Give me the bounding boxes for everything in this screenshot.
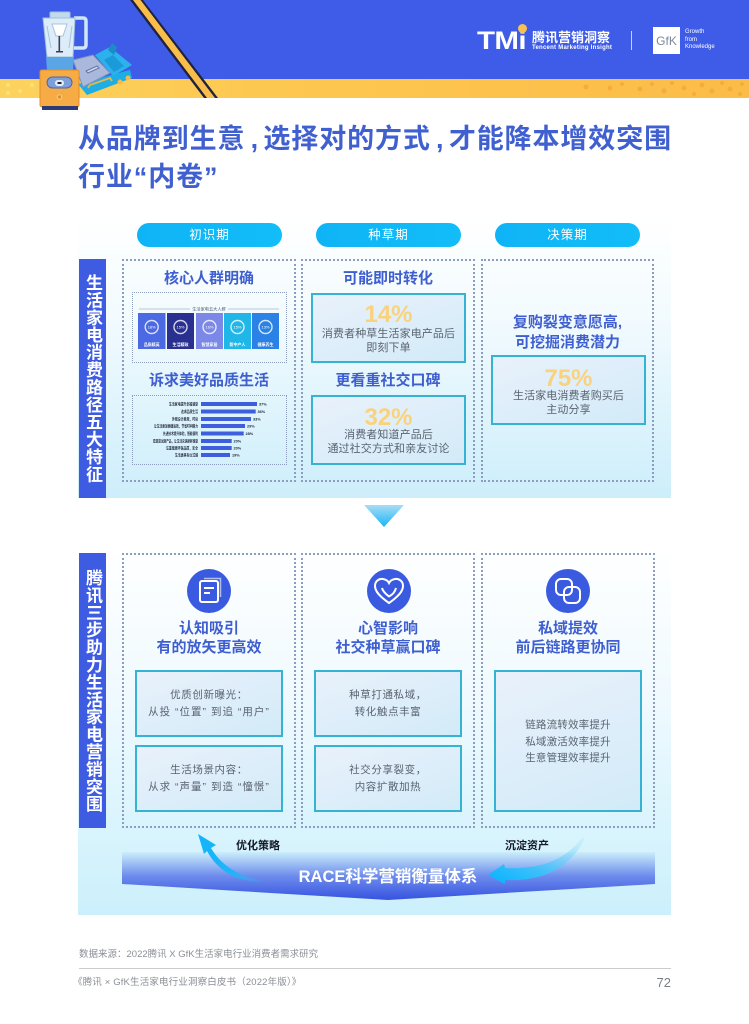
jug [43, 18, 75, 57]
card: scene content [135, 745, 283, 812]
card: efficiency list [494, 670, 642, 812]
stat description: 消费者知道产品后 [344, 429, 433, 441]
heading: social reputation: 更看重社交口碑 [335, 372, 440, 389]
panel: step 2 mind influence [301, 553, 475, 828]
tile 2: 生活精致 [172, 340, 188, 346]
chart box: five audience groups [132, 292, 287, 363]
panel: Tencent three steps background [78, 545, 671, 915]
bar labels: 先进技术提升体验，智能便利 [162, 430, 198, 436]
bar labels: 外观设计美观，时尚 [172, 416, 198, 421]
TMi wordmark: TMi [477, 27, 526, 55]
panel: decision stage [481, 259, 654, 482]
tile 5: 健康养生 [257, 340, 273, 346]
blue jug base [46, 57, 74, 70]
line 1: 生活场景内容： [170, 764, 248, 776]
line 2: 从求 “声量” 到造 “憧憬” [148, 781, 270, 793]
icon: blender and waffle maker [40, 12, 132, 110]
stat description: 生活家电消费者购买后 [513, 390, 624, 402]
bar values: 20% [233, 439, 241, 443]
bar labels: 追求品质生活 [180, 408, 198, 414]
page number: 72 [657, 975, 671, 990]
line 2: 从投 “位置” 到追 “用户” [148, 706, 270, 718]
diagonal stripe [130, 0, 218, 98]
title [78, 124, 672, 192]
chart title: 生活家电五大人群 [192, 305, 226, 312]
logo: GfK: GfK [656, 34, 677, 48]
panel: consumer path background [78, 215, 671, 498]
tile 3: 16% [205, 324, 213, 329]
tile 5: 13% [261, 324, 269, 329]
stage pill: 种草期 [316, 223, 461, 247]
stage pill: 种草期: 种草期 [368, 228, 409, 242]
heading: cognition: 认知吸引 [179, 620, 239, 637]
logo divider [631, 31, 632, 50]
heading: consumption potential: 可挖掘消费潜力 [515, 334, 620, 351]
chart box: quality life bar chart [132, 395, 287, 465]
bar values: 29% [246, 424, 255, 428]
stat 32%: 32% [364, 404, 413, 431]
English brand name: Tencent Marketing Insight [532, 45, 612, 51]
tile 1 [138, 312, 165, 348]
bar values [232, 402, 267, 457]
panel: seeding stage [301, 259, 475, 482]
stage pill: 初识期 [137, 223, 282, 247]
chart title [138, 305, 278, 312]
line 1: 优质创新曝光： [170, 689, 248, 701]
RACE band [122, 852, 655, 900]
panel: initial stage [122, 259, 296, 482]
stat 14%: 14% [364, 301, 413, 328]
footer rule [79, 968, 671, 969]
bars [200, 402, 256, 456]
label: settle assets: 沉淀资产 [505, 840, 549, 852]
tile 4: 新中产人 [229, 340, 245, 346]
yellow stripe with dots [0, 79, 749, 98]
side label: five features [79, 259, 106, 498]
panel: step 1 cognition [122, 553, 296, 828]
GfK tagline: from [685, 36, 697, 42]
tile 1: 品质精英 [143, 340, 159, 346]
tile 3: 智慧家居 [201, 340, 217, 346]
heading: instant conversion: 可能即时转化 [343, 270, 433, 287]
side label: three steps [79, 553, 106, 828]
bar labels: 让生活更加便捷高效，节省时间精力 [154, 423, 198, 428]
line 2: 私域激活效率提升 [525, 736, 611, 748]
tile 5 [252, 312, 278, 348]
tile 4 [224, 312, 250, 348]
GfK tagline: Growth [685, 29, 704, 35]
title: 从品牌到生意 选择对的方式 才能降本增效突围 [78, 124, 672, 154]
jug handle [73, 18, 86, 48]
blue header background [0, 0, 749, 79]
heading: efficient targeting: 有的放矢更高效 [156, 639, 262, 656]
card: social sharing [314, 745, 462, 812]
bar labels [152, 401, 198, 457]
waffle maker base [78, 70, 132, 95]
tile 1: 18% [147, 324, 156, 329]
stage pill: 决策期: 决策期 [547, 228, 588, 242]
bar labels: 愿意尝试新产品，让生活充满新鲜感受 [152, 438, 198, 443]
stage pill: 决策期 [495, 223, 640, 247]
stat description line 2: 通过社交方式和亲友讨论 [327, 443, 450, 455]
panel: step 3 private domain [481, 553, 655, 828]
arrow: optimize strategy [198, 834, 262, 882]
heading: repurchase: 复购裂变意愿高, [513, 314, 622, 331]
RACE label: RACE科学营销衡量体系 [299, 868, 477, 886]
line 3: 生意管理效率提升 [525, 752, 611, 764]
GfK tagline [685, 28, 715, 50]
heading: private efficiency: 私域提效 [538, 620, 598, 637]
tile 4: 15% [233, 324, 241, 329]
icon: linked squares [546, 569, 590, 613]
side label: five features: 生活家电消费路径五大特征 [83, 274, 102, 483]
arrow: settle assets [488, 838, 584, 884]
source note: 数据来源：2022腾讯 X GfK生活家电行业消费者需求研究 [79, 949, 318, 960]
stat description line 2: 即刻下单 [366, 342, 411, 354]
orange dot [518, 24, 527, 33]
card: 75% [491, 355, 646, 425]
logo: GfK [653, 27, 680, 54]
orange base [40, 70, 79, 107]
icon: book [187, 569, 231, 613]
bar labels: 注重健康环保品质，安全 [166, 445, 198, 450]
card: private domain [314, 670, 462, 737]
stat description: 消费者种草生活家电产品后 [322, 328, 455, 340]
line 1: 社交分享裂变， [349, 764, 427, 776]
stat 75%: 75% [544, 365, 593, 392]
tile 2 [166, 312, 194, 348]
title: 行业“内卷” [78, 162, 218, 192]
Chinese brand name: 腾讯营销洞察 [532, 30, 610, 45]
heading: core audience: 核心人群明确 [164, 270, 254, 287]
bar values: 19% [232, 453, 240, 457]
title: , [436, 124, 444, 154]
logo: TMI Tencent Marketing Insight [477, 24, 612, 55]
tile 3 [196, 312, 222, 348]
side label: three steps: 腾讯三步助力生活家电营销突围 [83, 569, 102, 812]
label: optimize strategy: 优化策略 [236, 840, 280, 852]
footer publication title: 《腾讯 × GfK生活家电行业洞察白皮书（2022年版）》 [73, 977, 301, 988]
line 2: 内容扩散加热 [355, 781, 421, 793]
arrow: down triangle [364, 505, 404, 527]
line 1: 链路流转效率提升 [525, 719, 611, 731]
line 2: 转化触点丰富 [355, 706, 421, 718]
card: exposure [135, 670, 283, 737]
header band [0, 0, 749, 98]
heading: social seeding: 社交种草赢口碑 [335, 639, 440, 656]
line 1: 种草打通私域， [349, 689, 427, 701]
icon: heart [367, 569, 411, 613]
tile 2: 15% [176, 324, 184, 329]
stage pill: 初识期: 初识期 [189, 228, 230, 242]
bar labels: 生活家电提升幸福感受 [168, 401, 198, 406]
heading: quality life: 诉求美好品质生活 [149, 372, 269, 389]
heading: mind influence: 心智影响 [358, 620, 418, 637]
bar values: 28% [245, 432, 253, 436]
bar labels: 生活更具有仪式感 [174, 452, 198, 457]
heading: chain coordination: 前后链路更协同 [515, 639, 620, 656]
bar values: 20% [233, 446, 241, 450]
stat description line 2: 主动分享 [546, 404, 591, 416]
GfK tagline: Knowledge [685, 44, 715, 50]
card: 32% [311, 395, 466, 465]
bar values: 37% [258, 402, 267, 406]
card: 14% [311, 293, 466, 363]
title: , [251, 124, 258, 154]
bar values: 33% [252, 417, 261, 421]
bar values: 36% [257, 410, 265, 414]
